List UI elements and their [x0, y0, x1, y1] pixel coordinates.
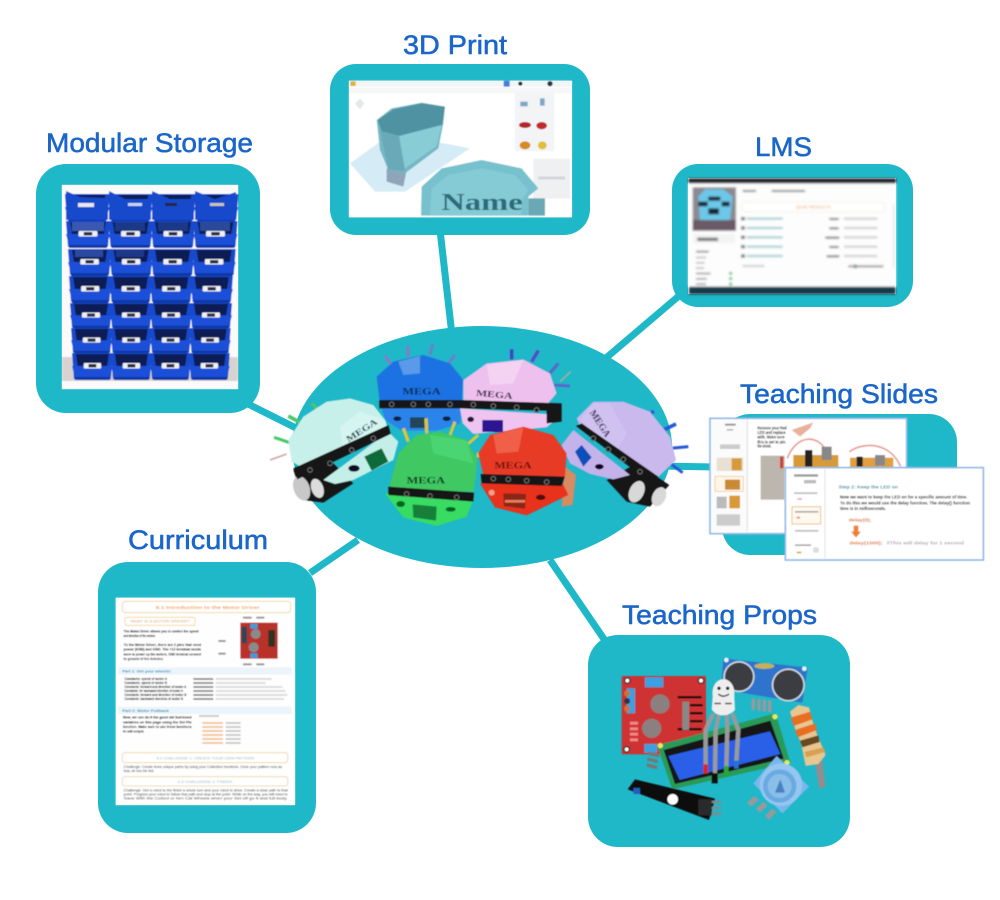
central ellipse with robots [270, 326, 688, 568]
slide: back circuit slide: the circuit. [757, 444, 771, 449]
label: Name: Name [441, 190, 523, 216]
document: motor driver lesson: to call output. [123, 730, 144, 734]
robots group [270, 344, 688, 526]
slide: front code slide: To do this we would use the delay function. The delay() function [840, 500, 970, 505]
icon: LCD display [657, 713, 790, 789]
icon: resistor [790, 705, 826, 789]
document: motor driver lesson: WHAT IS A MOTOR DRIVER? [130, 619, 191, 624]
robot: red: MEGA [494, 461, 532, 471]
document: motor driver lesson: Save With the Collect or him Cat Wheels when your Set off go It and full body. [124, 797, 288, 801]
photo: stacked blue storage bins [62, 185, 238, 389]
document: motor driver lesson [116, 598, 295, 805]
slide: back circuit slide: Remove your Red [757, 425, 787, 430]
robot: pink [460, 349, 571, 434]
document: motor driver lesson: variables on this page using the Set Pin [123, 720, 192, 724]
document: motor driver lesson: 9.3 CHALLENGE 2: FINISH! [178, 780, 232, 784]
icon: motor driver board [622, 676, 706, 769]
heading: section title: 9.1 Introduction to the Motor Driver [156, 605, 260, 611]
title: 3D Print: 3D Print [403, 30, 508, 60]
slide: front code slide: delay(0); [849, 517, 872, 522]
electronic components [622, 658, 826, 820]
robot: pink: MEGA [476, 388, 514, 401]
document: motor driver lesson: Constants: forward and direction of motor A [124, 685, 187, 689]
slide: front code slide [785, 468, 983, 560]
document: motor driver lesson: Constants: backward direction of motor B [124, 697, 183, 701]
slide: back circuit slide: with. Make sure [756, 435, 785, 440]
document: motor driver lesson: Part 1: Get your wheels! [122, 669, 171, 674]
slide: back circuit slide [710, 418, 907, 534]
panel: modular storage [36, 164, 260, 413]
document: motor driver lesson: Part 2: Motor Pullback [122, 708, 170, 713]
document: motor driver lesson: point. Program your robot to follow that path and stop at the point. While on the way, you will need to [124, 793, 288, 797]
document: motor driver lesson: Constants: speed of motor A [124, 677, 167, 681]
document: motor driver lesson: The Motor Driver allows you to control the speed [124, 629, 199, 633]
document: motor driver lesson: and direction of the motors. [124, 634, 156, 638]
icon: RGB LED [703, 679, 739, 783]
slide: front code slide: //This will delay for 1 second [887, 540, 964, 545]
slide: front code slide: Now we want to keep the LED on for a specific amount of time. [840, 495, 967, 500]
title: LMS: LMS [755, 132, 812, 162]
document: motor driver lesson: Challenge: Create three unique paths by using your Collection functions. Once your pattern runs as [124, 765, 282, 769]
panel: 3D print [330, 64, 590, 235]
robot: lavender [562, 402, 688, 509]
icon: line sensor [628, 779, 721, 820]
document: motor driver lesson: function. Make sure to use these functions [123, 725, 192, 729]
icon: ultrasonic sensor [721, 658, 808, 712]
connector lines [248, 230, 715, 642]
panel: teaching slides [710, 414, 983, 560]
slide: back circuit slide: LED and replace [757, 430, 786, 435]
title: Modular Storage: Modular Storage [46, 128, 253, 158]
label: quiz results: QUIZ RESULTS [796, 205, 831, 210]
document: motor driver lesson: Constants: for backward direction of motor A [124, 689, 183, 693]
robot: blue: MEGA [402, 387, 441, 397]
robot: mint [270, 398, 398, 503]
document: motor driver lesson: To the Motor Driver, there are 2 pins that need [124, 643, 201, 647]
icon: potentiometer [747, 756, 809, 820]
screenshot: learning management system [688, 178, 896, 294]
robot: mint: MEGA [344, 416, 380, 444]
slide: front code slide: delay(1000); [849, 540, 883, 545]
slide: front code slide: time is in milliseconds. [840, 506, 886, 511]
document: motor driver lesson: Constants: forward and direction of motor B [124, 693, 187, 697]
robot: lavender: MEGA [588, 408, 613, 439]
title: Curriculum: Curriculum [128, 525, 268, 555]
screenshot: 3D modelling software [349, 81, 572, 217]
title: Teaching Slides: Teaching Slides [740, 379, 938, 409]
slide: front code slide: Step 2: Keep the LED on [839, 484, 898, 489]
title: Teaching Props: Teaching Props [622, 600, 817, 630]
robot: blue [377, 344, 463, 431]
robot: red [477, 427, 576, 515]
panel: LMS [672, 164, 913, 307]
panel: teaching props [588, 635, 850, 847]
robot: green [385, 418, 478, 526]
document: motor driver lesson: Now, we can do it the good old fashioned [123, 716, 192, 720]
slide: back circuit slide: this is set to pin [757, 439, 786, 444]
document: motor driver lesson: Constants: speed of motor B [124, 681, 167, 685]
document: motor driver lesson: to ground of the Arduino. [124, 657, 164, 661]
document: motor driver lesson: power (ENB) and GND. The +12 terminal needs [124, 648, 201, 652]
panel: curriculum [98, 562, 316, 833]
document: motor driver lesson: more to power up the motors. GND terminal connect [124, 652, 202, 656]
robot: green: MEGA [407, 476, 446, 486]
document: motor driver lesson: 9.2 CHALLENGE 1: CREATE YOUR OWN PATTERN [156, 756, 255, 760]
document: motor driver lesson: loop, all runs the test. [124, 769, 154, 773]
document: motor driver lesson: Challenge: Get a robot to the finish a whole turn and your robot to drive. Create a clear path to that [124, 789, 288, 793]
